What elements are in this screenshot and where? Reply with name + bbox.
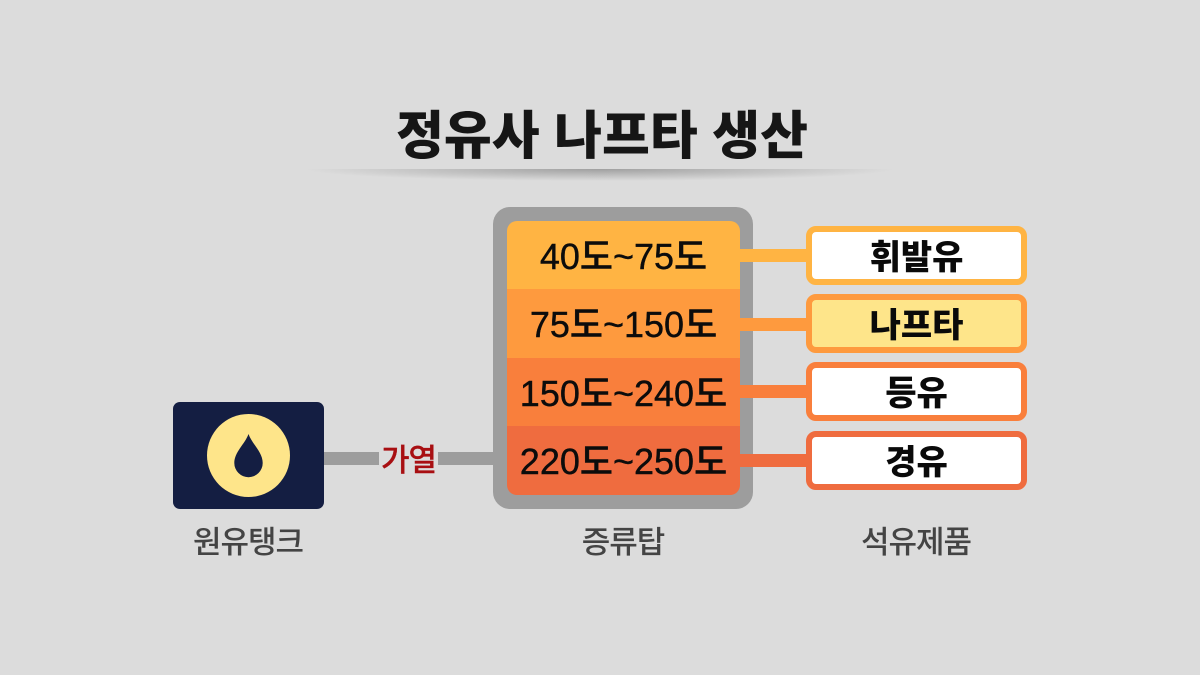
band: 75-150: 75도~150도 [530, 304, 717, 345]
product: volatile: 휘발유 [870, 230, 963, 279]
icon: crude oil tank [173, 402, 324, 509]
product: volatile [806, 226, 1027, 285]
band: 220-250 [507, 426, 740, 495]
pipe: tank to tower [324, 452, 494, 465]
label: crude oil tank: 원유탱크 [193, 517, 303, 562]
product: naphtha [806, 294, 1027, 353]
band: 40-75: 40도~75도 [540, 236, 707, 277]
connector: kerosene [740, 385, 810, 398]
tower bands [507, 221, 740, 495]
connector: diesel [740, 454, 810, 466]
product: diesel [806, 431, 1027, 490]
connector: volatile [740, 249, 810, 262]
product: diesel: 경유 [885, 435, 948, 484]
band: 40-75 [507, 221, 740, 290]
band: 220-250: 220도~250도 [520, 441, 727, 482]
title: 정유사 나프타 생산 [396, 94, 808, 169]
label: tower: 증류탑 [582, 517, 664, 562]
label: heating: 가열 [381, 435, 436, 480]
label: products: 석유제품 [861, 517, 971, 562]
product: kerosene [806, 362, 1027, 421]
band: 150-240: 150도~240도 [520, 373, 727, 414]
panel: distillation tower [493, 207, 753, 509]
product: kerosene: 등유 [885, 366, 948, 415]
band: 75-150 [507, 289, 740, 358]
connector: naphtha [740, 318, 810, 330]
band: 150-240 [507, 358, 740, 427]
connectors [740, 249, 806, 467]
title shadow [305, 169, 895, 181]
icon: oil drop in circle [207, 414, 290, 497]
product: naphtha: 나프타 [870, 298, 963, 347]
